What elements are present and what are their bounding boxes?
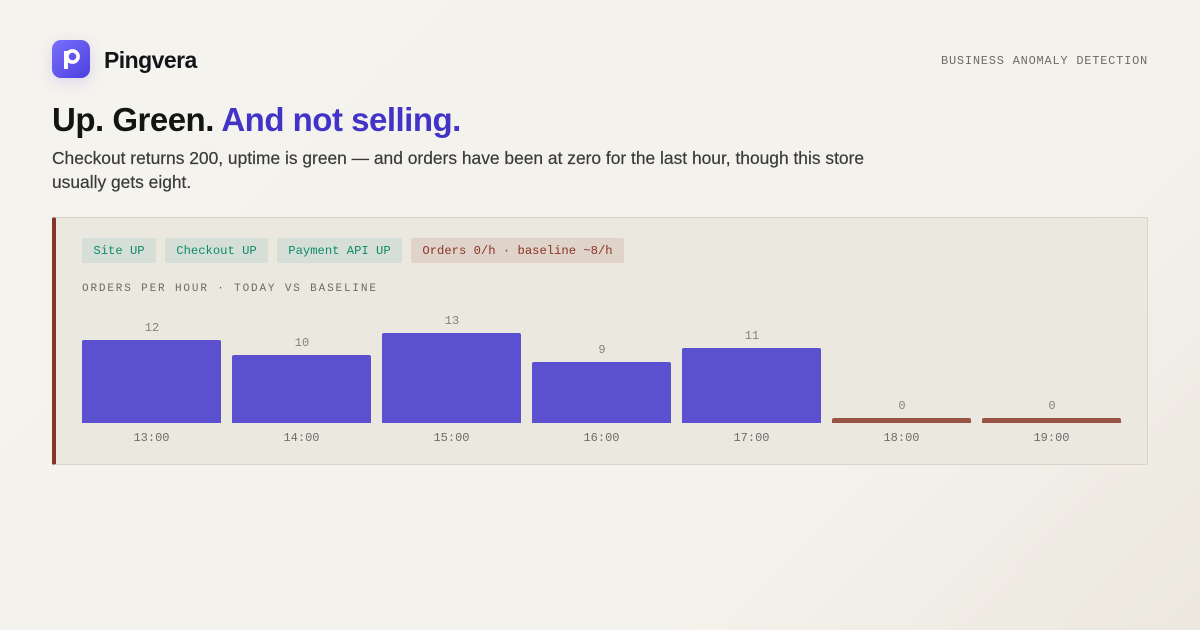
brand name: Pingvera — [104, 47, 197, 73]
bar 18:00: 0 — [898, 399, 906, 413]
status chip: site — [82, 238, 156, 263]
bar 17:00: 17:00 — [733, 431, 770, 445]
bar 14:00 — [232, 336, 371, 445]
bar 13:00: 13:00 — [133, 431, 170, 445]
bar chart — [82, 314, 1121, 445]
bar 19:00 — [982, 399, 1121, 445]
bar 15:00: 15:00 — [433, 431, 470, 445]
status chip: site: Site UP — [93, 244, 145, 258]
status chip: orders — [411, 238, 624, 263]
bar 18:00: 18:00 — [883, 431, 920, 445]
status chip: payment API — [277, 238, 402, 263]
header tagline: BUSINESS ANOMALY DETECTION — [941, 54, 1148, 68]
logo icon — [52, 40, 90, 78]
bar 13:00 — [82, 321, 221, 445]
bar 17:00: 11 — [745, 329, 759, 343]
status chip: checkout — [165, 238, 268, 263]
bar 14:00: 14:00 — [283, 431, 320, 445]
bar 14:00: 10 — [295, 336, 309, 350]
bar 19:00: 19:00 — [1033, 431, 1070, 445]
status chip: orders: Orders 0/h · baseline ~8/h — [422, 244, 613, 258]
bar 13:00: 12 — [145, 321, 159, 335]
bar 15:00 — [382, 314, 521, 445]
subheading: Checkout returns 200, uptime is green — and orders have been at zero for the last hour, though this store — [52, 148, 864, 168]
bar 16:00: 9 — [598, 343, 606, 357]
headline: Up. Green. And not selling. — [52, 101, 461, 138]
bar 19:00: 0 — [1048, 399, 1056, 413]
chart title: ORDERS PER HOUR · TODAY VS BASELINE — [82, 283, 378, 295]
status chip: payment API: Payment API UP — [288, 244, 391, 258]
panel: orders anomaly — [52, 217, 1148, 465]
subheading — [52, 148, 864, 192]
bar 18:00 — [832, 399, 971, 445]
status chip: checkout: Checkout UP — [176, 244, 257, 258]
bar 15:00: 13 — [445, 314, 459, 328]
bar 16:00: 16:00 — [583, 431, 620, 445]
bar 16:00 — [532, 343, 671, 445]
subheading: usually gets eight. — [52, 172, 191, 192]
bar 17:00 — [682, 329, 821, 445]
